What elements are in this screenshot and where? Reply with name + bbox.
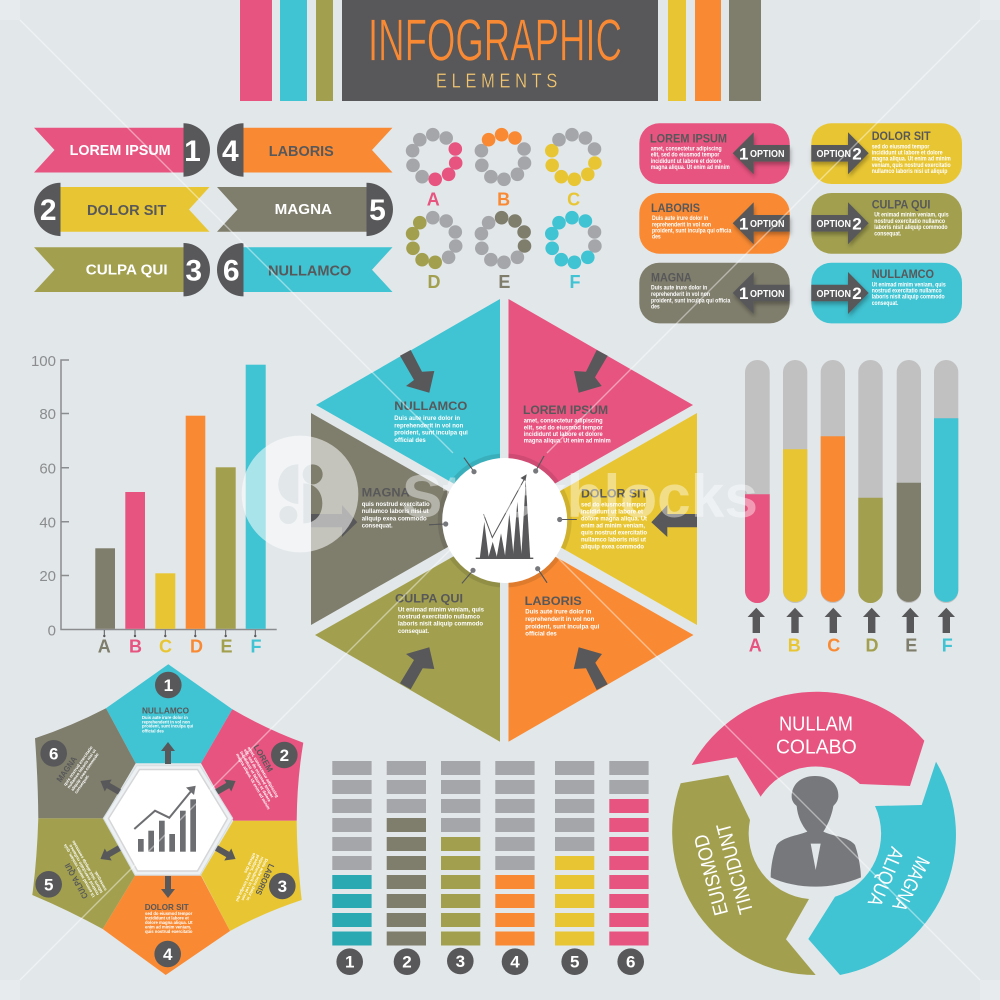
segment: culpa qui: laboris nisit aliquip commodo: [398, 621, 483, 628]
option card: nullamco: laboris nisit aliquip commodo: [872, 294, 945, 301]
option card: laboris: LABORIS: [651, 203, 700, 215]
segment: magna: quis nostrud exercitatio: [362, 501, 430, 508]
segmented bars: 4: [510, 953, 520, 972]
option card: magna: MAGNA: [651, 273, 692, 285]
ribbon 6: [217, 243, 392, 296]
bar chart: A: [98, 636, 111, 656]
ribbon 6: NULLAMCO: [268, 264, 351, 280]
number badges: [35, 672, 298, 967]
option card: laboris: des: [652, 234, 661, 241]
segment: nullamco: [316, 299, 500, 510]
ribbon 6: 6: [223, 254, 240, 288]
segmented bars: 5: [570, 953, 579, 972]
tube chart: E: [905, 636, 917, 656]
segment: nullamco: NULLAMCO: [394, 399, 467, 413]
bar chart: 60: [39, 460, 56, 478]
segment 1: [106, 664, 232, 763]
small hexagon diagram: [32, 664, 303, 975]
option card: lorem ipsum: [639, 123, 790, 184]
segment: lorem ipsum: amet, consectetur adipiscing: [524, 417, 603, 424]
segmented bars: 1: [345, 953, 354, 972]
option card: laboris: [639, 193, 790, 254]
dot ring D: [406, 211, 462, 292]
segment: nullamco: official des: [394, 437, 426, 444]
segment 3: proident, sunt inculpa qui: [235, 854, 261, 903]
ribbon 2: [34, 183, 210, 236]
bar chart: 20: [39, 568, 56, 585]
number badges: 4: [163, 945, 173, 964]
connector pointers: [429, 456, 577, 583]
arrow: nullam colabo: COLABO: [776, 736, 857, 758]
segment 6: MAGNA: [54, 754, 79, 784]
segmented bars: 3: [456, 952, 465, 971]
number badges: 6: [49, 744, 58, 763]
segment 4: sed do eiusmod tempor: [145, 911, 193, 916]
segment 2: incididunt ut labore et dolore: [239, 750, 272, 803]
header banner: INFOGRAPHIC: [368, 8, 622, 74]
segment: nullamco: Duis aute irure dolor in: [394, 415, 460, 422]
tube chart: [745, 360, 958, 656]
ribbon 2: DOLOR SIT: [87, 203, 167, 219]
segment: laboris: LABORIS: [525, 594, 582, 608]
segment 5: CULPA QUI: [62, 862, 90, 901]
tube chart: B: [788, 636, 801, 656]
segment 5: laboris nisit aliquip commodo: [70, 839, 104, 894]
arrow: euismod tincidunt: [672, 775, 816, 975]
center hex chart icon: [103, 766, 233, 875]
dot ring F: F: [569, 272, 580, 292]
bar chart: D: [190, 636, 203, 656]
option card: lorem ipsum: 1: [739, 144, 748, 164]
segment 4: dolore magna aliqua. Ut: [145, 920, 193, 925]
segment: lorem ipsum: [508, 299, 693, 510]
segment 4: incididunt ut labore et: [145, 916, 189, 920]
option card: lorem ipsum: LOREM IPSUM: [650, 134, 727, 146]
segment 1: official des: [142, 728, 165, 733]
segment 5: [32, 818, 135, 929]
option card: culpa qui: nostrud exercitatio nullamco: [874, 218, 945, 225]
ribbon 2: 2: [40, 194, 57, 227]
option card: dolor sit: incididunt ut labore et dolore: [872, 149, 943, 156]
bar chart: 80: [39, 406, 56, 423]
segment 3: [201, 821, 302, 931]
bar chart: 40: [39, 514, 56, 532]
segmented bars: 6: [626, 953, 635, 972]
dot ring D: D: [427, 272, 440, 292]
segment 3: LABORIS: [253, 862, 277, 897]
option card: dolor sit: [811, 123, 962, 184]
option card: magna: reprehenderit in vol non: [651, 291, 710, 298]
ribbon 5: [217, 183, 393, 236]
segment: culpa qui: nostrud exercitatio nullamco: [398, 614, 480, 621]
center circle icon: [429, 456, 577, 583]
option card: magna: Duis aute irure dolor in: [651, 285, 707, 292]
segment 4: [103, 876, 230, 975]
segment: dolor sit: aliquip exea commodo: [581, 543, 644, 550]
bar chart: 100: [31, 353, 56, 370]
radial arrows: [97, 742, 239, 898]
option card: magna: OPTION: [750, 289, 784, 300]
option card: culpa qui: laboris nisit aliquip commodo: [874, 224, 948, 231]
segment: laboris: proident, sunt inculpa qui: [525, 623, 600, 630]
dot ring A: [406, 128, 462, 209]
ribbon 1: 1: [184, 135, 201, 168]
segment 2: magna aliqua. Ut enim ad minim: [235, 752, 271, 811]
segment 5: consequat.: [93, 870, 108, 892]
segment: nullamco: proident, sunt inculpa qui: [394, 430, 468, 437]
arrow: euismod tincidunt: EUISMOD: [690, 832, 733, 918]
segment: laboris: [508, 530, 694, 742]
dot ring C: C: [567, 189, 580, 209]
dot ring F: [545, 211, 602, 292]
option card: dolor sit: magna aliqua. Ut enim ad minim: [872, 156, 951, 163]
ribbon 3: 3: [185, 254, 202, 288]
bar chart: C: [159, 636, 172, 656]
option card: nullamco: [811, 263, 962, 323]
tube chart: C: [827, 636, 840, 656]
segment: dolor sit: [511, 413, 697, 625]
segment: nullamco: reprehenderit in vol non: [394, 422, 464, 429]
segment: laboris: Duis aute irure dolor in: [525, 609, 592, 616]
option card: laboris: proident, sunt inculpa qui officia: [652, 228, 732, 235]
option card: nullamco: 2: [852, 284, 862, 303]
arrow: magna aliqua: [808, 762, 956, 975]
header banner: [240, 0, 761, 101]
segment 6: aliquip exea commodo: [70, 752, 100, 792]
ribbon 1: LOREM IPSUM: [70, 143, 171, 159]
segment 3: reprehenderit in vol non: [240, 856, 265, 902]
segment: dolor sit: nullamco laboris nisi ut: [581, 536, 646, 543]
option card: dolor sit: veniam, quis nostrud exercitatio: [872, 162, 951, 169]
option card: culpa qui: Ut enimad minim veniam, quis: [874, 212, 949, 219]
bar chart: E: [220, 636, 233, 656]
option card: laboris: Duis aute irure dolor in: [652, 215, 708, 222]
ribbon 4: [217, 123, 392, 177]
icon: person: [771, 776, 861, 887]
segment 6: quis nostrud exercitatio: [62, 745, 94, 787]
segment: laboris: official des: [525, 631, 557, 638]
segment: magna: MAGNA: [362, 486, 410, 500]
segment 6: [35, 708, 136, 818]
segment 2: amet, consectetur adipiscing: [247, 746, 280, 799]
bar chart: 0: [48, 622, 56, 640]
circular arrows with person: [672, 692, 956, 975]
tube chart: D: [866, 636, 878, 656]
segment: culpa qui: [315, 530, 500, 742]
option card: laboris: OPTION: [750, 219, 784, 230]
arrow: euismod tincidunt: TINCIDUNT: [713, 821, 758, 916]
segment 4: quis nostrud exercitatio: [145, 929, 193, 934]
segment 4: DOLOR SIT: [145, 902, 190, 912]
option card: magna: proident, sunt inculpa qui officia: [651, 297, 731, 304]
arrow: nullam colabo: NULLAM: [779, 714, 853, 736]
segment 2: LOREM: [252, 743, 275, 774]
segment 3: Duis aute irure dolor in: [245, 858, 269, 902]
bar chart: B: [129, 636, 142, 656]
segment: culpa qui: CULPA QUI: [395, 591, 463, 605]
segment 6: nullamco laboris nisi ut: [66, 748, 97, 789]
option card: laboris: reprehenderit in vol non: [652, 221, 711, 228]
option card: culpa qui: consequat.: [874, 230, 902, 237]
option card: dolor sit: OPTION: [816, 149, 851, 160]
option card: culpa qui: [811, 193, 962, 254]
segment: magna: [311, 413, 497, 625]
central hexagon: [311, 299, 697, 742]
segment: dolor sit: sed do eiusmod tempor: [581, 502, 647, 509]
segment: laboris: reprehenderit in vol non: [525, 616, 595, 623]
arrow: nullam colabo: [692, 692, 924, 797]
segment 2: elit, sed do eiusmod tempor: [243, 748, 275, 799]
segment: dolor sit: incididunt ut labore et: [581, 509, 643, 516]
segment 4: enim ad minim veniam,: [145, 924, 191, 930]
dot ring E: [475, 211, 531, 292]
option card: magna: [639, 263, 790, 323]
segmented bars: 2: [402, 953, 412, 972]
option card: nullamco: OPTION: [816, 289, 851, 300]
segment 1: Duis aute irure dolor in: [142, 715, 188, 720]
option card: magna: 1: [739, 284, 748, 303]
option card: magna: des: [651, 303, 660, 310]
segment: dolor sit: enim ad minim veniam,: [581, 522, 645, 529]
bar chart: [31, 353, 277, 656]
option card: nullamco: consequat.: [872, 300, 899, 307]
segment: culpa qui: consequat.: [398, 628, 429, 635]
option card: dolor sit: sed do eiusmod tempor: [872, 143, 930, 150]
segment: lorem ipsum: LOREM IPSUM: [523, 403, 608, 417]
segment: magna: aliquip exea commodo: [362, 515, 427, 522]
arrow: magna aliqua: ALIQUA: [863, 844, 907, 910]
option card: culpa qui: 2: [852, 214, 862, 234]
dot ring E: E: [498, 272, 510, 292]
segment: lorem ipsum: magna aliqua. Ut enim ad minim: [524, 438, 611, 445]
number badges: 2: [280, 746, 289, 765]
segment 3: official des: [243, 852, 257, 875]
segment: dolor sit: dolore magna aliqua. Ut: [581, 516, 647, 523]
number badges: 5: [44, 875, 53, 894]
segment 6: consequat.: [73, 773, 90, 794]
segment 5: nostrud exercitatio nullamco: [67, 843, 100, 896]
option card: dolor sit: 2: [852, 144, 862, 164]
option card: lorem ipsum: magna aliqua. Ut enim ad minim: [651, 164, 730, 171]
dot ring C: [545, 128, 602, 209]
ribbon 4: LABORIS: [269, 144, 334, 160]
tube chart: A: [749, 636, 762, 656]
header banner: ELEMENTS: [436, 69, 557, 92]
option card: dolor sit: DOLOR SIT: [872, 131, 931, 143]
segmented bars: [332, 761, 649, 975]
segment 2: [201, 709, 303, 821]
watermark: Stockblocks: [402, 463, 758, 530]
option card: nullamco: Ut enimad minim veniam, quis: [872, 281, 946, 288]
segment: dolor sit: quis nostrud exercitatio: [581, 529, 647, 536]
dot ring B: B: [497, 189, 510, 209]
segment: lorem ipsum: incididunt ut labore et dolore: [524, 431, 603, 438]
option card: lorem ipsum: incididunt ut labore et dolore: [651, 158, 722, 165]
segment: lorem ipsum: elit, sed do eiusmod tempor: [524, 424, 603, 431]
option card: lorem ipsum: amet, consectetur adipiscing: [651, 146, 722, 153]
arrow: magna aliqua: MAGNA: [887, 853, 933, 915]
segment: culpa qui: Ut enimad minim veniam, quis: [398, 606, 485, 613]
ribbon 5: 5: [369, 194, 386, 227]
option card: laboris: 1: [739, 214, 748, 234]
bar chart: F: [250, 636, 262, 656]
segment 1: NULLAMCO: [142, 705, 189, 715]
tube chart: F: [942, 636, 953, 656]
option card: nullamco: nostrud exercitatio nullamco: [872, 288, 942, 295]
segment 1: proident, sunt inculpa qui: [142, 724, 193, 729]
option card: lorem ipsum: elit, sed do eiusmod tempor: [651, 152, 720, 159]
option card: dolor sit: nullamco laboris nisi ut aliquip: [872, 168, 948, 175]
segment: dolor sit: DOLOR SIT: [581, 486, 649, 500]
ribbon 3: CULPA QUI: [86, 263, 168, 279]
ribbon 3: [34, 243, 210, 296]
ribbon 1: [34, 123, 210, 177]
option card: lorem ipsum: OPTION: [750, 149, 784, 160]
segment 1: reprehenderit in vol non: [142, 719, 190, 724]
ribbon 5: MAGNA: [275, 202, 333, 218]
option card: culpa qui: OPTION: [816, 219, 851, 230]
dot ring A: A: [427, 189, 440, 209]
option card: culpa qui: CULPA QUI: [872, 200, 930, 212]
segment 5: Ut enimad minim veniam, quis: [62, 843, 96, 898]
option card: nullamco: NULLAMCO: [872, 269, 934, 281]
number badges: 3: [278, 877, 287, 896]
segment: magna: consequat.: [362, 522, 393, 529]
number badges: 1: [164, 676, 173, 695]
ribbon 4: 4: [222, 135, 239, 168]
dot ring B: [475, 128, 531, 209]
segment: magna: nullamco laboris nisi ut: [362, 508, 429, 515]
